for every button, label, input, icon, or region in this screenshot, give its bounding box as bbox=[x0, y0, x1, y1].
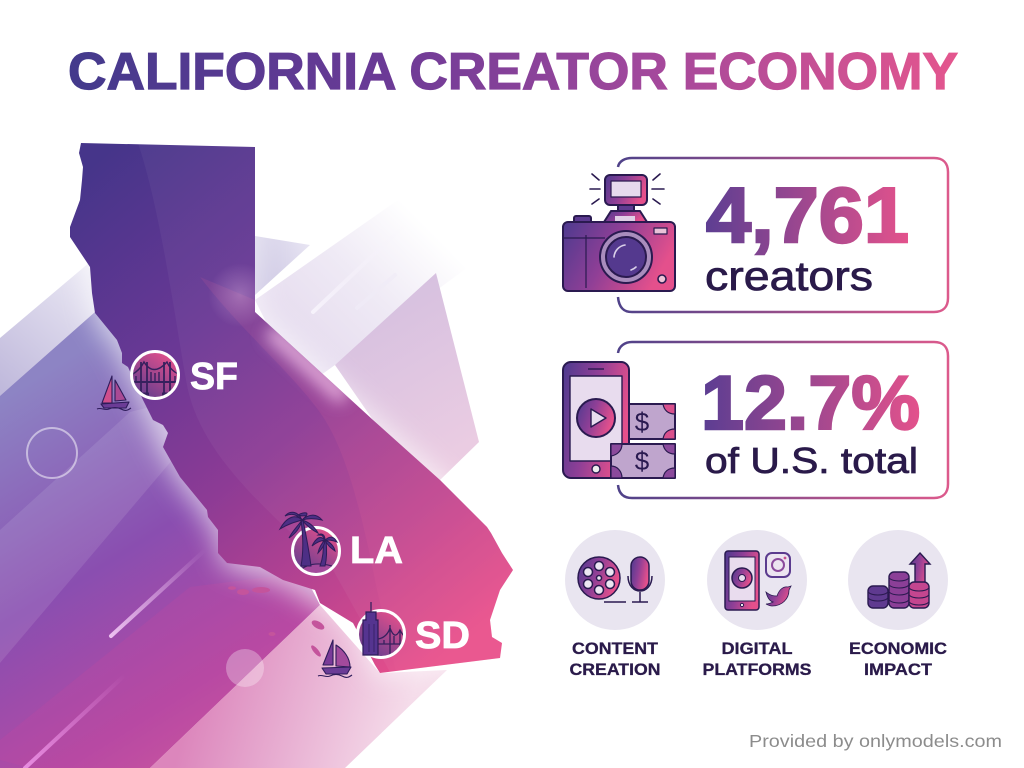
marker: San Francisco bbox=[130, 350, 180, 400]
label: IMPACT bbox=[864, 661, 932, 679]
label SF: SF bbox=[190, 356, 238, 398]
light streaks bbox=[25, 225, 405, 768]
label: DIGITAL bbox=[722, 640, 792, 658]
icon: phone and money: $ bbox=[635, 446, 650, 476]
sailboat south bbox=[318, 640, 352, 677]
stat card: share bbox=[563, 342, 948, 498]
stat card: creators bbox=[563, 158, 948, 312]
decorative ring bbox=[27, 428, 77, 478]
feature: content creation bbox=[565, 530, 665, 679]
icon: phone with social logos bbox=[725, 551, 791, 610]
number: 4,761 bbox=[706, 171, 909, 259]
feature: economic impact bbox=[848, 530, 948, 679]
label SD: SD bbox=[415, 615, 470, 657]
islands bbox=[228, 586, 326, 658]
label LA: LA bbox=[350, 530, 403, 572]
map of California bbox=[70, 140, 530, 690]
card frame bbox=[618, 342, 948, 498]
background diagonal bands bbox=[0, 143, 513, 768]
marker: Los Angeles bbox=[280, 512, 341, 580]
icon: camera bbox=[563, 174, 675, 291]
sailboat north bbox=[97, 376, 131, 410]
icon: phone and money bbox=[563, 362, 675, 478]
feature: digital platforms bbox=[702, 530, 812, 679]
label: CREATION bbox=[570, 661, 660, 679]
caption: of U.S. total bbox=[705, 440, 918, 481]
icon: film reel and microphone bbox=[578, 557, 652, 602]
icon: phone and money: $ bbox=[635, 407, 650, 437]
marker: San Diego bbox=[356, 602, 408, 659]
label: ECONOMIC bbox=[849, 640, 947, 658]
caption: creators bbox=[705, 253, 873, 299]
label: PLATFORMS bbox=[702, 661, 812, 679]
label: CONTENT bbox=[572, 640, 658, 658]
decorative disc bbox=[226, 649, 264, 687]
number: 12.7% bbox=[701, 361, 920, 446]
icon: coin stacks and arrow bbox=[868, 553, 930, 608]
title: CALIFORNIA CREATOR ECONOMY bbox=[68, 43, 958, 101]
attribution: Provided by onlymodels.com bbox=[749, 731, 1002, 751]
card frame bbox=[618, 158, 948, 312]
